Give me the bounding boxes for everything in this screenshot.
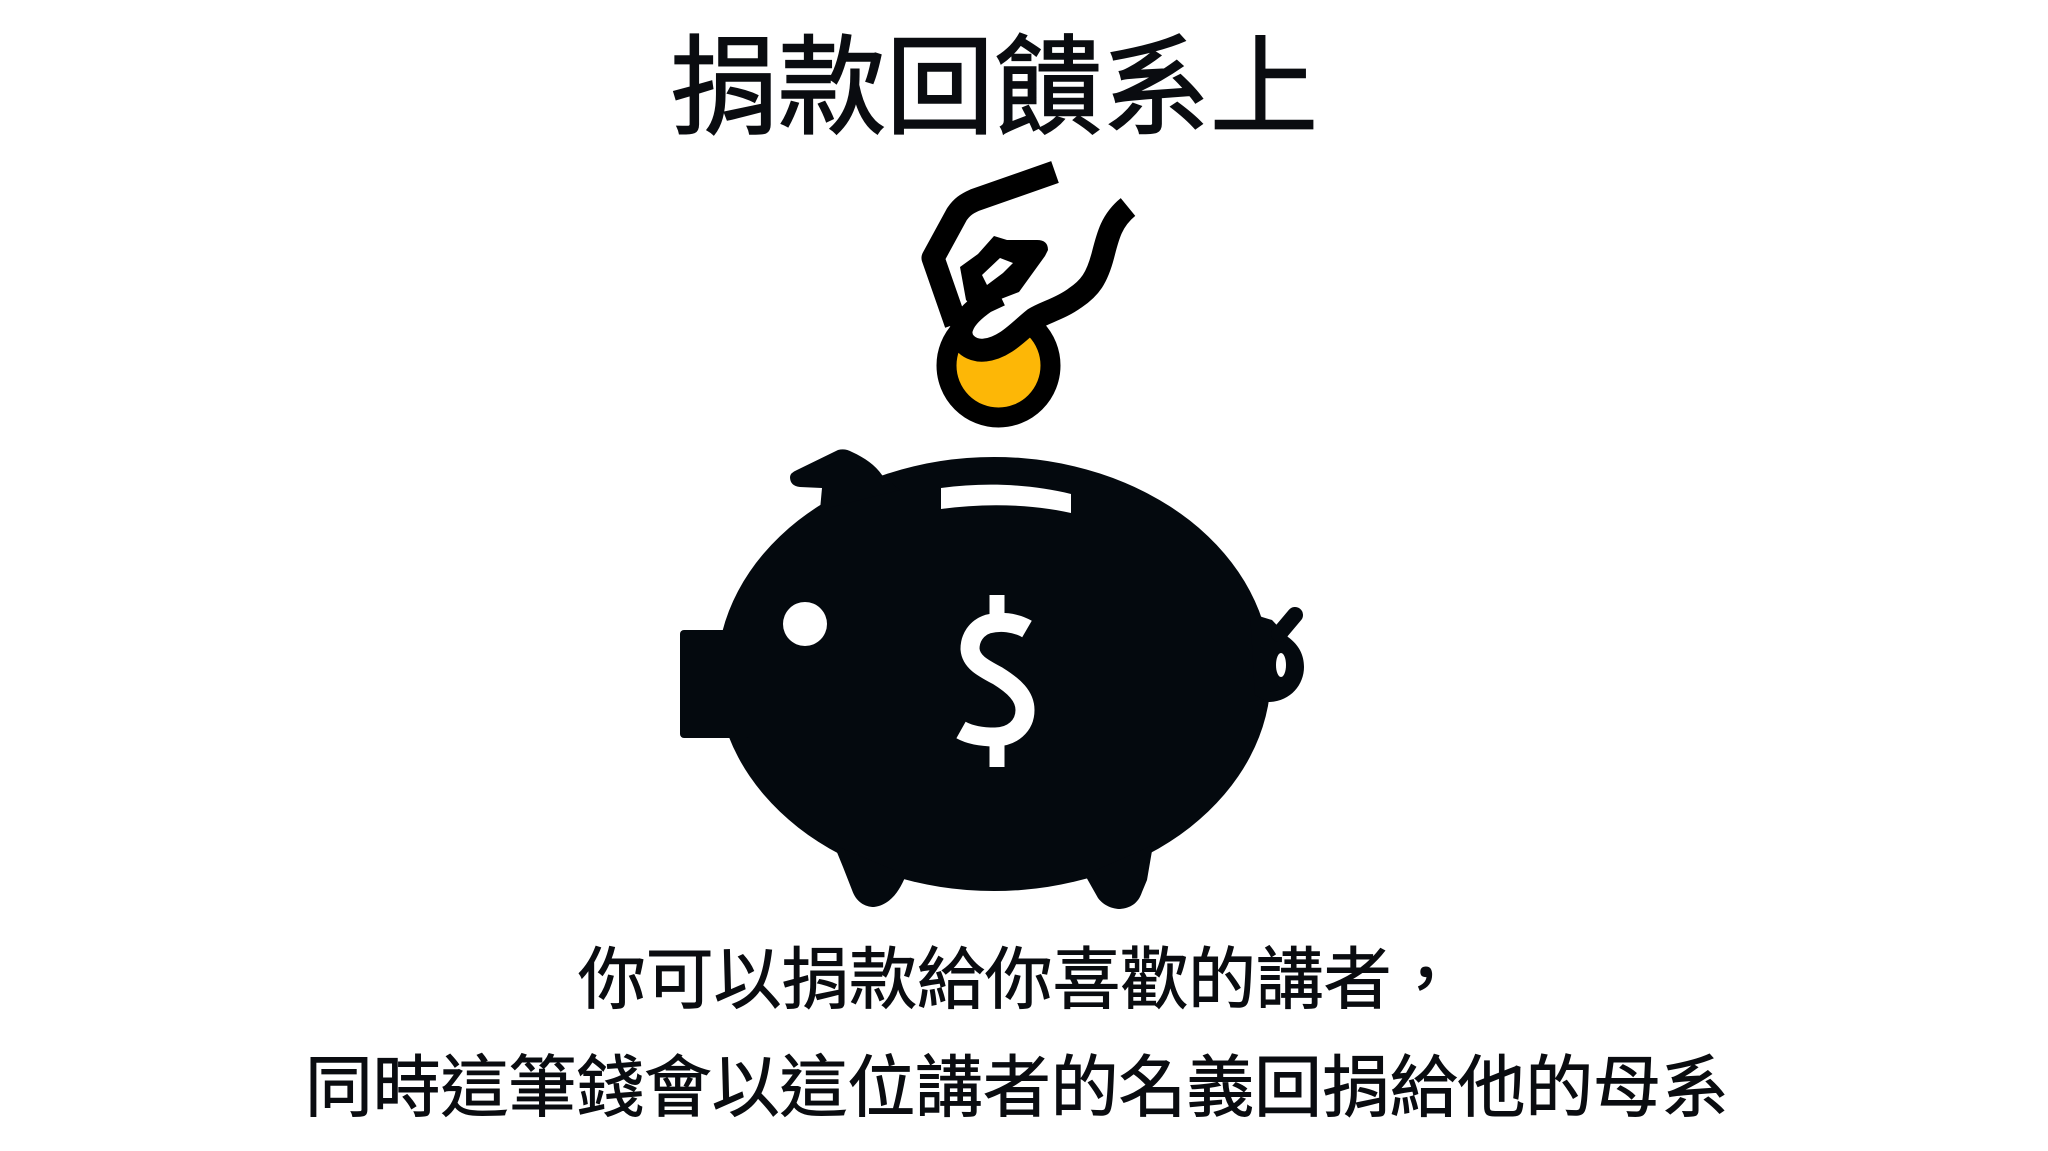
pig ear	[790, 449, 900, 510]
text block: line 1: 你可以捐款給你喜歡的講者，	[578, 943, 1459, 1018]
pig front leg	[834, 845, 906, 907]
text block: line 2: 同時這筆錢會以這位講者的名義回捐給他的母系	[305, 1051, 1729, 1126]
icon: piggy bank	[680, 449, 1304, 909]
coin slot	[941, 485, 1071, 513]
pig snout	[680, 630, 750, 738]
title: 捐款回饋系上	[670, 27, 1318, 148]
dollar sign	[961, 595, 1027, 767]
icon: hand dropping coin	[932, 170, 1128, 418]
pig body	[717, 457, 1271, 891]
hand outline	[933, 172, 1128, 350]
finger pinch shape	[960, 236, 1048, 315]
pig tail	[1250, 612, 1304, 702]
pig back leg	[1085, 845, 1153, 909]
hand interior	[932, 170, 1128, 350]
pig eye	[783, 602, 827, 646]
coin	[946, 314, 1050, 418]
